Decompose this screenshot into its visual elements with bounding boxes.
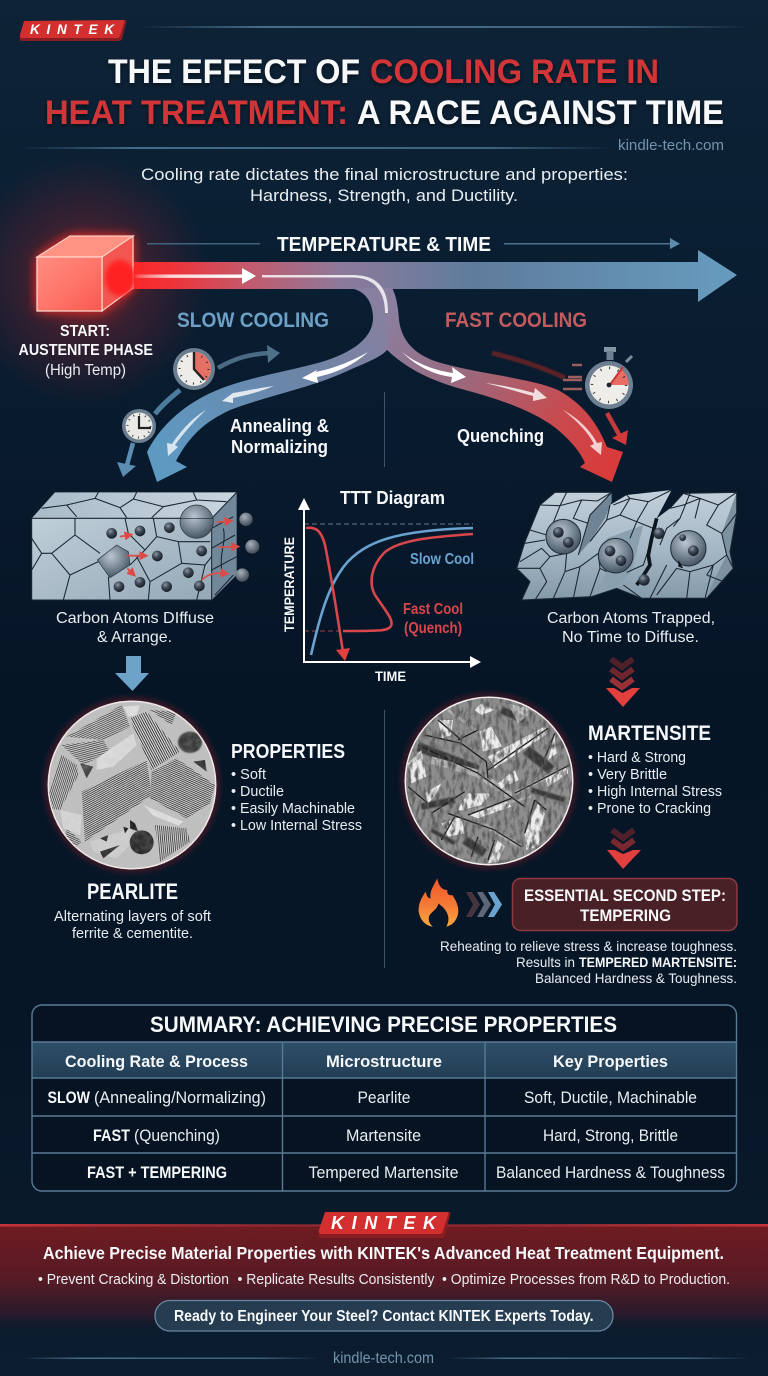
label: pearlite xyxy=(54,879,211,942)
panel: pearlite properties: • Easily Machinable xyxy=(231,800,355,817)
row: fast: Hard, Strong, Brittle xyxy=(543,1127,678,1145)
chart: TTT diagram: TTT Diagram xyxy=(340,488,445,508)
row: slow: (Annealing/Normalizing) xyxy=(94,1089,266,1107)
icon: slow clock large xyxy=(173,348,215,390)
illustration: diffusing carbon block xyxy=(32,492,259,600)
arrow: to tempering xyxy=(607,830,641,869)
subtitle: Cooling rate dictates the final microstructure and properties: xyxy=(141,165,628,184)
chart: TTT diagram: TEMPERATURE xyxy=(282,537,297,632)
row: fast: (Quenching) xyxy=(134,1127,220,1145)
panel: martensite properties xyxy=(588,722,722,817)
side arrows: fast stopwatch xyxy=(492,353,628,445)
chart: TTT diagram: Slow Cool xyxy=(410,551,474,568)
label: start austenite: (High Temp) xyxy=(45,362,126,379)
call to action button: Ready to Engineer Your Steel? Contact KINTEK Experts Today. xyxy=(174,1308,594,1325)
subtitle xyxy=(141,165,628,205)
row: fast plus tempering: FAST + TEMPERING xyxy=(87,1164,227,1182)
table header: Microstructure xyxy=(326,1052,442,1071)
callout: essential second step: ESSENTIAL SECOND STEP: xyxy=(524,886,726,905)
title: A RACE AGAINST TIME xyxy=(357,94,724,132)
logo: KINTEK top: KINTEK xyxy=(30,22,115,37)
logo: KINTEK footer: KINTEK xyxy=(331,1213,438,1233)
text: tempering result: Reheating to relieve stress & increase toughness. xyxy=(440,938,737,954)
source url top: kindle-tech.com xyxy=(618,137,724,154)
label: start austenite: AUSTENITE PHASE xyxy=(18,342,153,359)
panel: martensite properties: MARTENSITE xyxy=(588,722,711,745)
label: pearlite: PEARLITE xyxy=(87,879,178,904)
table title: SUMMARY: ACHIEVING PRECISE PROPERTIES xyxy=(150,1012,617,1037)
micrograph: pearlite xyxy=(40,693,224,877)
illustration: trapped carbon block xyxy=(517,490,737,600)
arrow: to martensite xyxy=(606,659,640,707)
caption: trapped: Carbon Atoms Trapped, xyxy=(547,610,715,627)
panel: pearlite properties: • Low Internal Stress xyxy=(231,817,362,834)
label: annealing and normalizing xyxy=(230,416,329,457)
micrograph: martensite xyxy=(397,689,581,873)
slow cooling branch arrow xyxy=(147,288,387,482)
panel: pearlite properties: • Ductile xyxy=(231,783,284,800)
call to action button xyxy=(155,1300,613,1331)
flow highlights xyxy=(120,268,602,456)
logo: KINTEK footer xyxy=(319,1212,450,1238)
caption: diffuse: & Arrange. xyxy=(97,629,172,646)
chart: TTT diagram: (Quench) xyxy=(404,620,462,637)
title: HEAT TREATMENT: xyxy=(45,94,348,132)
footer benefits: • Prevent Cracking & Distortion xyxy=(38,1272,229,1288)
chart: TTT diagram: TIME xyxy=(375,668,406,684)
row: slow: SLOW xyxy=(48,1089,90,1107)
main flow arrow xyxy=(110,250,737,302)
arrow: to pearlite xyxy=(115,656,149,691)
chart: TTT diagram: Fast Cool xyxy=(403,601,463,618)
panel: martensite properties: • Very Brittle xyxy=(588,766,667,783)
row: fast: Martensite xyxy=(346,1127,421,1145)
callout: essential second step xyxy=(512,878,737,930)
footer benefits: • Optimize Processes from R&D to Production. xyxy=(442,1272,730,1288)
summary table xyxy=(32,1005,736,1191)
logo: KINTEK top xyxy=(20,20,126,41)
caption: trapped: No Time to Diffuse. xyxy=(562,629,699,646)
caption: trapped xyxy=(547,610,715,646)
row: fast: FAST xyxy=(93,1127,130,1145)
label: pearlite: Alternating layers of soft xyxy=(54,909,211,925)
source url bottom: kindle-tech.com xyxy=(333,1350,434,1367)
label: annealing and normalizing: Normalizing xyxy=(231,437,328,457)
heading: temperature and time axis: TEMPERATURE & TIME xyxy=(277,234,491,256)
callout: essential second step: TEMPERING xyxy=(580,906,671,925)
panel: pearlite properties xyxy=(231,740,362,834)
panel: pearlite properties: • Soft xyxy=(231,766,267,783)
icon: stopwatch xyxy=(585,347,633,409)
row: slow: Soft, Ductile, Machinable xyxy=(524,1089,697,1107)
label: pearlite: ferrite & cementite. xyxy=(72,926,193,942)
side arrows: slow clocks xyxy=(117,345,280,477)
row: fast plus tempering: Balanced Hardness & Toughness xyxy=(496,1164,725,1182)
chart: TTT diagram xyxy=(282,488,481,684)
footer benefits: • Replicate Results Consistently xyxy=(238,1272,435,1288)
heading: slow cooling: SLOW COOLING xyxy=(177,309,329,332)
panel: martensite properties: • Prone to Cracking xyxy=(588,800,711,817)
label: start austenite xyxy=(18,323,153,379)
row: slow: Pearlite xyxy=(358,1089,410,1107)
label: quenching: Quenching xyxy=(457,426,544,446)
row: fast plus tempering xyxy=(87,1164,725,1182)
caption: diffuse xyxy=(56,610,214,646)
fast cooling branch arrow xyxy=(386,288,623,482)
panel: martensite properties: • Hard & Strong xyxy=(588,749,686,766)
table header xyxy=(65,1052,668,1071)
title: THE EFFECT OF xyxy=(108,53,360,91)
icon: austenite hot cube xyxy=(37,236,135,311)
text: tempering result xyxy=(440,938,737,986)
table header: Key Properties xyxy=(553,1052,668,1071)
label: annealing and normalizing: Annealing & xyxy=(230,416,329,436)
text: tempering result: Results in xyxy=(516,954,575,970)
caption: diffuse: Carbon Atoms DIffuse xyxy=(56,610,214,627)
text: tempering result: TEMPERED MARTENSITE: xyxy=(579,954,737,970)
heading: fast cooling: FAST COOLING xyxy=(445,309,587,332)
row: slow xyxy=(48,1089,697,1107)
icon: flame xyxy=(419,878,458,927)
table header: Cooling Rate & Process xyxy=(65,1052,248,1071)
footer headline: Achieve Precise Material Properties with KINTEK's Advanced Heat Treatment Equipment. xyxy=(43,1243,724,1263)
title: COOLING RATE IN xyxy=(370,53,659,91)
panel: martensite properties: • High Internal Stress xyxy=(588,783,722,800)
row: fast plus tempering: Tempered Martensite xyxy=(308,1164,458,1182)
heading: temperature and time axis xyxy=(147,234,680,256)
footer band xyxy=(0,1224,768,1335)
arrow: tempering chevrons xyxy=(466,892,502,917)
title xyxy=(45,53,724,132)
icon: slow clock small xyxy=(122,409,156,443)
text: tempering result: Balanced Hardness & Toughness. xyxy=(535,970,737,986)
subtitle: Hardness, Strength, and Ductility. xyxy=(250,186,518,205)
panel: pearlite properties: PROPERTIES xyxy=(231,740,345,763)
footer benefits xyxy=(38,1272,730,1288)
label: start austenite: START: xyxy=(60,323,110,340)
row: fast xyxy=(93,1127,678,1145)
